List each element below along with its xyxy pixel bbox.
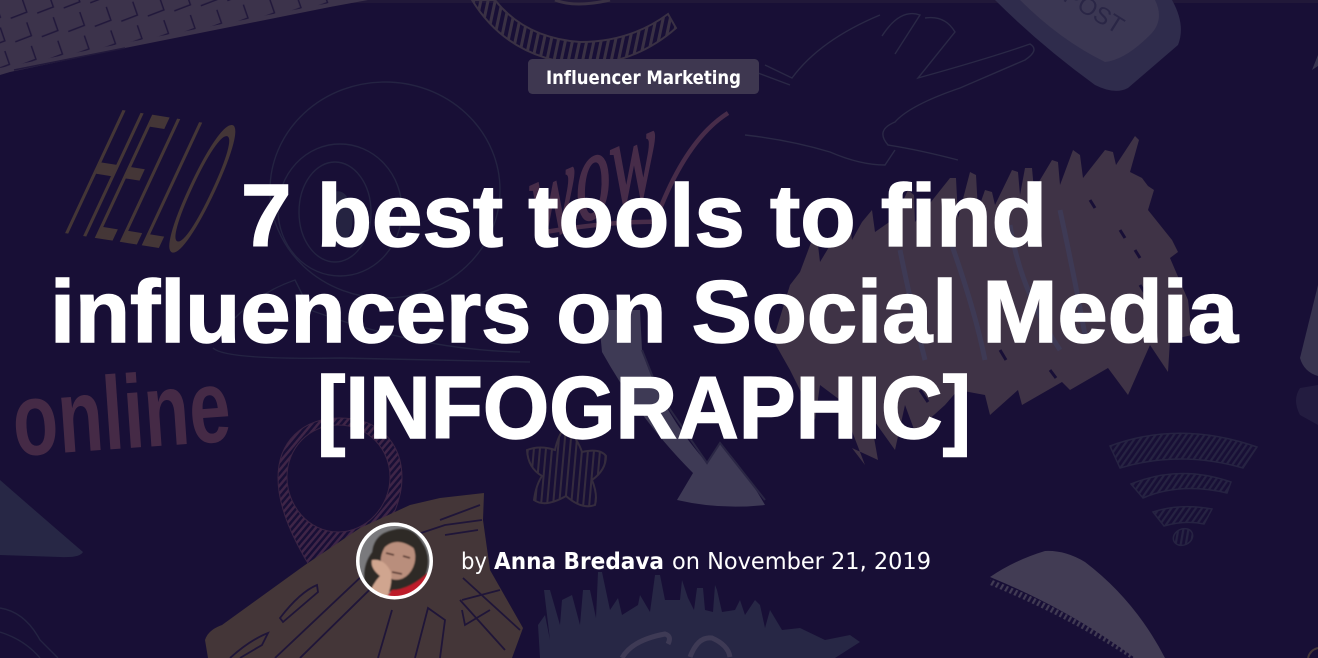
byline	[461, 549, 931, 575]
title	[50, 166, 1239, 457]
doodle: phone with post	[995, 0, 1181, 91]
author avatar	[355, 522, 435, 602]
doodle: wifi symbol	[1110, 433, 1257, 548]
doodle: arrow	[598, 310, 765, 507]
title: influencers on Social Media	[50, 262, 1239, 361]
doodle: brush scribble	[773, 136, 1192, 465]
doodle: hand outline	[745, 14, 1034, 165]
title: 7 best tools to find	[241, 166, 1047, 265]
doodle: hatched star	[527, 426, 606, 506]
doodle: keyboard	[0, 0, 368, 75]
doodle: online lettering: online	[9, 348, 234, 479]
doodle: HELLO lettering: HELLO	[44, 81, 260, 290]
doodle: webcam outline	[213, 82, 530, 362]
title: [INFOGRAPHIC]	[317, 358, 971, 457]
doodle: map pin	[278, 418, 402, 598]
category badge	[528, 59, 759, 94]
byline: by	[461, 549, 487, 575]
category badge: Influencer Marketing	[546, 67, 741, 89]
doodle: right edge shapes	[1296, 55, 1318, 425]
doodle: bottom left outline	[0, 608, 58, 658]
doodle: curved hatched band	[472, 0, 676, 65]
doodle: wow flourish	[545, 113, 728, 232]
byline: Anna Bredava	[494, 549, 664, 575]
doodle: bottom right corner mark	[1308, 648, 1318, 658]
byline: on November 21, 2019	[672, 549, 931, 575]
doodle: left triangle	[0, 480, 83, 557]
doodle: bottom burst	[538, 572, 860, 658]
doodle: notebook	[205, 493, 523, 658]
doodle: wow lettering: wow	[524, 79, 661, 273]
top edge strip	[0, 0, 1318, 3]
doodle: brush head	[990, 551, 1165, 658]
